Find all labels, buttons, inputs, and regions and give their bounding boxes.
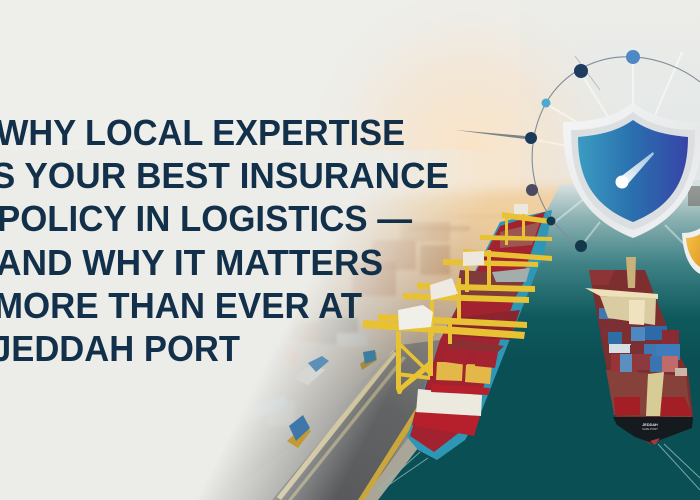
truck near bottom [287,415,311,448]
gauge needle [616,152,654,188]
node [574,64,588,78]
left pointer ray [455,130,525,139]
ship name text [642,423,658,431]
node [525,132,537,144]
node [542,98,550,108]
arc [532,57,700,246]
title: AND WHY IT MATTERS [0,242,383,283]
port land area [120,185,620,500]
crane 3 [443,249,552,292]
gantry cranes [363,204,552,394]
title: WHY LOCAL EXPERTISE [0,112,405,153]
node [626,50,640,64]
node [575,240,587,252]
trucks and yard cargo [287,350,377,448]
truck near crane [360,350,377,370]
moored ship ropes [378,444,700,491]
title: POLICY IN LOGISTICS — [0,198,412,239]
node [546,216,556,226]
crane 1 [363,305,527,394]
icon: small gold shield [682,227,700,275]
yard container rows [195,214,510,426]
icon: shield with gauge [563,102,700,238]
distant ship behind shield [688,186,700,206]
fog fade over the port [0,150,700,500]
ship name text: JEDDAH [642,423,658,427]
network arc with nodes and rays [455,50,700,252]
sea [378,180,700,500]
node [526,184,538,196]
asphalt road [272,340,440,500]
ship name text: SAFE PORT [642,427,658,431]
crane 4 far [480,204,552,245]
docked container ship [407,210,552,460]
title: MORE THAN EVER AT [0,285,362,326]
rays [531,52,685,245]
white and blue containers [293,356,329,385]
crane 2 [403,278,535,336]
anchored container ship [585,257,693,445]
title [0,112,449,369]
